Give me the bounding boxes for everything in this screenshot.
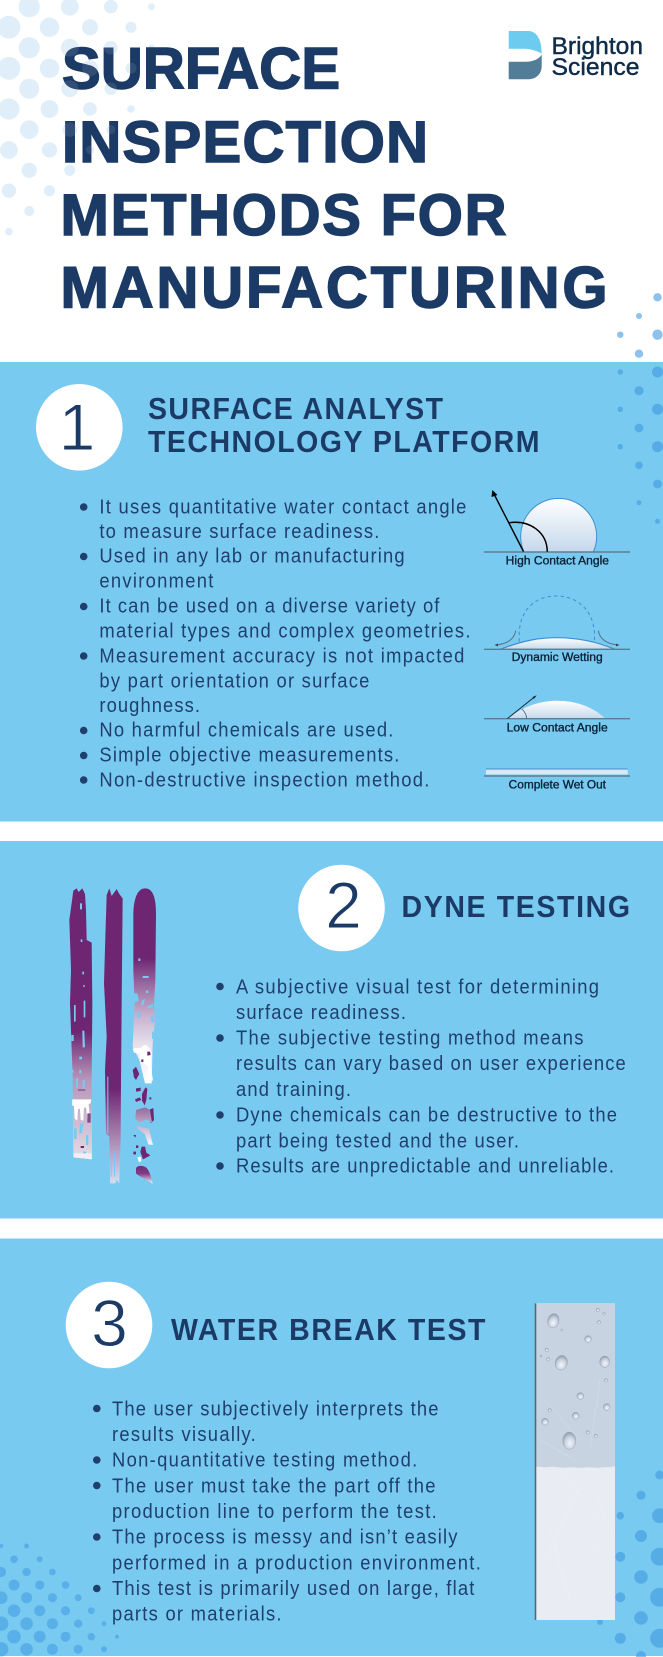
dots showing faintly over the title [61, 39, 136, 154]
heading: Surface Analyst Technology Platform: SURFACE ANALYST [148, 392, 443, 426]
logo: Brighton Science: Brighton [552, 33, 643, 60]
diagram: low contact angle: Low Contact Angle [507, 722, 608, 734]
number badge 2 [298, 865, 385, 951]
title: METHODS FOR [60, 183, 506, 248]
bullet list: section 1: It uses quantitative water contact angle [99, 497, 466, 519]
bullet list: section 1 [80, 497, 470, 792]
bullet list: section 3: performed in a production environment. [112, 1553, 481, 1575]
number badge 1: 1 [59, 390, 95, 464]
background dots: bottom right [597, 1471, 663, 1657]
bullet list: section 2: surface readiness. [236, 1002, 406, 1024]
bullet list: section 2: and training. [236, 1079, 351, 1101]
bullet list: section 1: by part orientation or surface [99, 671, 369, 693]
diagram: dynamic wetting: Dynamic Wetting [512, 652, 603, 664]
bullet list: section 1: Simple objective measurements. [99, 745, 399, 767]
number badge 2: 2 [325, 868, 362, 942]
heading: Dyne Testing: DYNE TESTING [402, 890, 630, 924]
logo: Brighton Science [509, 31, 643, 81]
heading: Surface Analyst Technology Platform: TECHNOLOGY PLATFORM [148, 425, 539, 459]
bullet list: section 1: material types and complex geometries. [99, 621, 470, 643]
diagram: complete wet out: Complete Wet Out [509, 780, 607, 792]
scratches [540, 1380, 610, 1600]
bullet list: section 3: The user subjectively interprets the [112, 1399, 439, 1421]
bullet list: section 2: A subjective visual test for determining [236, 977, 599, 999]
bullet list: section 2: Results are unpredictable and unreliable. [236, 1156, 614, 1178]
heading: Water Break Test: WATER BREAK TEST [171, 1313, 485, 1347]
bullet list: section 3: The process is messy and isn’t easily [112, 1527, 458, 1549]
panel: section 1 background [0, 362, 663, 822]
bullet list: section 3 [93, 1399, 481, 1626]
diagram: high contact angle [484, 490, 630, 568]
diagram: complete wet out [484, 769, 630, 792]
diagram: high contact angle: High Contact Angle [506, 556, 609, 568]
bullet list: section 3: production line to perform the test. [112, 1501, 437, 1523]
number badge 1 [36, 384, 123, 471]
heading: Surface Analyst Technology Platform [148, 392, 539, 459]
bullet list: section 2: results can vary based on user experience [236, 1053, 626, 1075]
bullet list: section 1: environment [99, 571, 214, 593]
bullet list: section 3: results visually. [112, 1424, 256, 1446]
panel: section 3 background [0, 1238, 663, 1656]
bullet list: section 3: The user must take the part off the [112, 1476, 435, 1498]
bullet list: section 2: Dyne chemicals can be destructive to the [236, 1105, 617, 1127]
bullet list: section 3: Non-quantitative testing method. [112, 1450, 417, 1472]
background dots: top right [617, 293, 663, 524]
bullet list: section 1: Measurement accuracy is not impacted [99, 646, 464, 668]
bullet list: section 3: parts or materials. [112, 1604, 282, 1626]
image: dyne test brush strokes [69, 888, 156, 1184]
diagram: low contact angle [484, 695, 630, 734]
bullet list: section 1: to measure surface readiness. [99, 521, 379, 543]
bullet list: section 1: roughness. [99, 695, 200, 717]
image: water break test panel [535, 1303, 615, 1620]
brush stroke 1 [69, 888, 92, 1159]
number badge 3 [66, 1282, 152, 1368]
background dots: top left [0, 0, 155, 235]
bullet list: section 2 [216, 977, 626, 1178]
background dots: bottom left [0, 1544, 119, 1657]
bullet list: section 2: The subjective testing method means [236, 1028, 583, 1050]
brush stroke 3 [133, 888, 156, 1184]
bullet list: section 1: It can be used on a diverse variety of [99, 596, 440, 618]
panel: section 2 background [0, 841, 663, 1218]
brush stroke 2 [104, 888, 123, 1183]
bullet list: section 2: part being tested and the user. [236, 1131, 519, 1153]
title: INSPECTION [62, 110, 428, 175]
diagram: dynamic wetting [484, 596, 630, 664]
water droplets [540, 1308, 610, 1449]
logo: Brighton Science: Science [552, 54, 640, 81]
bullet list: section 1: Used in any lab or manufacturing [99, 546, 405, 568]
bullet list: section 3: This test is primarily used on large, flat [112, 1578, 475, 1600]
bullet list: section 1: Non-destructive inspection method. [99, 770, 429, 792]
title: MANUFACTURING [60, 256, 608, 321]
number badge 3: 3 [91, 1286, 128, 1360]
title [60, 36, 608, 321]
title: SURFACE [62, 36, 340, 102]
bullet list: section 1: No harmful chemicals are used. [99, 720, 393, 742]
